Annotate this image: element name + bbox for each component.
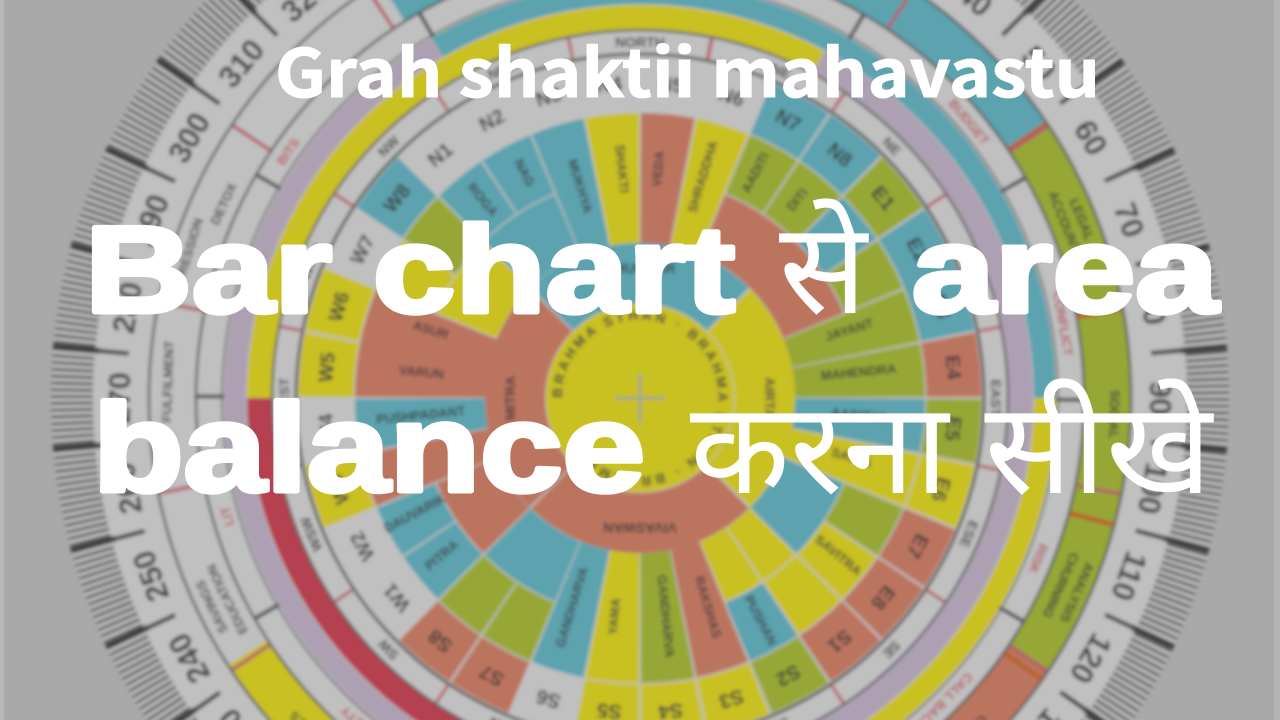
devta names: DAUVARIK — [381, 490, 449, 536]
zone names in sector ring: LEGAL — [1067, 196, 1097, 243]
outer pada labels: S8 — [424, 624, 457, 657]
devta names: SHRADDHA — [685, 138, 721, 214]
outer pada labels: S2 — [772, 660, 804, 690]
devta names: RAKSHAS — [692, 574, 725, 640]
inner quadrant names: MITRA — [502, 376, 518, 420]
devta names: VARUN — [398, 362, 445, 382]
zone names in sector ring: ANALYSIS — [1057, 560, 1097, 625]
headline line one: area — [912, 202, 1220, 339]
middle devta zone: outer half cells — [281, 39, 999, 720]
direction names ring: NW — [374, 132, 403, 160]
devta names: VEDA — [649, 149, 667, 187]
devta names: SAVITRA — [812, 532, 865, 579]
headline line two — [93, 377, 1214, 521]
zone names in sector ring: SAVINGS — [192, 577, 231, 636]
direction names ring: NORTH — [615, 34, 665, 50]
red direction labels: BITS — [274, 135, 303, 168]
zone names in sector ring — [159, 0, 1123, 720]
devta names: PITRA — [422, 537, 462, 573]
zone names in sector ring: DETOX — [207, 180, 240, 227]
devta names: NAG — [511, 156, 538, 189]
middle devta zone: inner half cells — [374, 132, 906, 664]
degree numbers: 110 — [1104, 547, 1154, 606]
outer pada cells — [196, 0, 1084, 720]
direction names ring: WSW — [297, 514, 325, 554]
degree numbers: 100 — [1131, 460, 1174, 517]
inner quadrant names — [502, 260, 778, 536]
headline line one: से — [779, 197, 870, 341]
degree numbers: 290 — [126, 190, 176, 250]
red direction labels: CONFLICT — [1050, 290, 1076, 357]
outer pada labels: N6 — [716, 83, 747, 112]
devta names: DITI — [784, 185, 811, 214]
ring outlines — [149, 0, 1131, 720]
direction names ring: NE — [879, 134, 904, 159]
outer pada labels: N3 — [533, 83, 564, 112]
outer pada labels: E7 — [902, 530, 932, 562]
degree numbers: 260 — [106, 460, 149, 517]
zone names in sector ring: CHURNING — [1040, 550, 1082, 620]
outer pada labels: E4 — [940, 354, 965, 381]
outer pada labels: E5 — [940, 415, 965, 442]
red direction labels: LIT — [217, 505, 237, 528]
zone names in sector ring: ACCOUNTS — [1045, 189, 1087, 263]
zone names in sector ring: SOCIAL — [1106, 390, 1123, 439]
red direction labels: BUDGET — [946, 96, 992, 148]
outer pada labels: W8 — [379, 180, 415, 217]
direction names ring: ESE — [956, 518, 982, 550]
devta names: YAMA — [605, 597, 623, 636]
outer pada labels: E3 — [926, 292, 955, 322]
dark 30 degree dividers — [210, 0, 1070, 720]
zone names in sector ring: EDUCATION — [204, 562, 250, 637]
outer pada labels: W3 — [325, 472, 354, 507]
outer pada labels: W2 — [346, 527, 380, 564]
outer pada labels: S1 — [823, 624, 856, 657]
outer pada labels: N8 — [822, 139, 856, 172]
direction names ring: WNW — [297, 241, 326, 282]
degree numbers: 240 — [161, 627, 217, 689]
direction names ring: SE — [879, 637, 904, 662]
outer pada labels: E8 — [866, 581, 899, 614]
outer pada labels: S6 — [534, 684, 564, 713]
direction names ring: SW — [374, 636, 402, 663]
headline line two: करना सीखे — [690, 377, 1214, 521]
direction names ring: WEST — [276, 377, 292, 418]
devta names: GANDHARVA — [552, 565, 591, 649]
devta names: MUKHYA — [565, 157, 596, 216]
subtitle: Grah shaktii mahavastu — [275, 21, 1100, 117]
devta names: GANDHARVA — [654, 574, 678, 659]
degree numbers: 270 — [102, 372, 137, 424]
degree numbers: 120 — [1063, 627, 1119, 689]
headline line one — [85, 197, 1220, 341]
devta names: ASUR — [411, 317, 451, 342]
direction names ring: EAST — [988, 379, 1004, 417]
devta names: SHAKTI — [612, 144, 632, 193]
brahmasthan centre: BRAHMA STHAN · BRAHMA STHAN · BRAHMA · — [550, 310, 730, 488]
outer pada labels — [315, 73, 965, 720]
outer pada labels: N2 — [476, 105, 509, 137]
headline line one: Bar chart — [85, 202, 735, 339]
devta names: AADITI — [738, 150, 772, 195]
devta names: PUSHPADANT — [375, 403, 466, 427]
outer pada labels: W6 — [325, 289, 354, 324]
outer pada labels: W5 — [315, 351, 340, 383]
devta names: JAYANT — [823, 315, 875, 344]
inner quadrant names: BHUDHAR — [605, 260, 675, 276]
red 22.5 degree ticks — [222, 0, 1058, 720]
degree numbers: 50 — [1014, 39, 1063, 88]
outer pada labels: W7 — [346, 232, 380, 269]
outer pada labels: S7 — [476, 660, 508, 690]
degree numbers: 310 — [211, 32, 271, 94]
outer pada labels: N4 — [596, 73, 624, 98]
devta names: PUSHAN — [741, 593, 780, 648]
red direction labels — [217, 96, 1076, 720]
degree numbers: 80 — [1132, 288, 1173, 328]
outer pada labels: W1 — [379, 579, 415, 616]
direction names ring: NNW — [485, 55, 523, 83]
degree numbers: 250 — [126, 546, 176, 606]
zone names in sector ring: FULFILMENT — [159, 340, 177, 423]
zone names in sector ring: DEPRESSION — [167, 216, 206, 302]
degree numbers: 70 — [1107, 198, 1151, 242]
outer pada labels: E2 — [902, 234, 932, 266]
devta names: AADITYA — [830, 405, 889, 425]
devta names: MAHENDRA — [820, 361, 898, 383]
outer pada labels: W4 — [315, 412, 340, 445]
direction names ring: ENE — [956, 245, 982, 278]
degree numbers: 60 — [1067, 114, 1115, 161]
outer pada labels: N5 — [657, 73, 684, 98]
outer pada labels: N7 — [771, 105, 804, 137]
red direction labels: RISK — [1025, 542, 1051, 577]
outer pada labels: N1 — [424, 139, 458, 172]
outer pada labels: E1 — [866, 182, 899, 215]
middle devta zone: full-height cells — [353, 111, 927, 685]
degree numbers: 300 — [161, 107, 217, 169]
outer pada labels: E6 — [926, 474, 955, 504]
direction names ring: NNE — [760, 56, 793, 82]
devta names: SATYA — [830, 444, 875, 471]
degree numbers: 280 — [106, 279, 149, 336]
devta names: ROGA — [465, 180, 501, 220]
degree numbers: 90 — [1143, 381, 1178, 415]
devta names — [375, 138, 898, 659]
inner quadrant names: AIRTA — [762, 377, 778, 419]
outer pada labels: S3 — [716, 684, 746, 713]
direction names ring — [276, 34, 1004, 720]
inner quadrant names: VIVASWAN — [603, 520, 677, 536]
inner quadrant ring — [463, 221, 817, 575]
headline line two: balance — [93, 379, 645, 518]
